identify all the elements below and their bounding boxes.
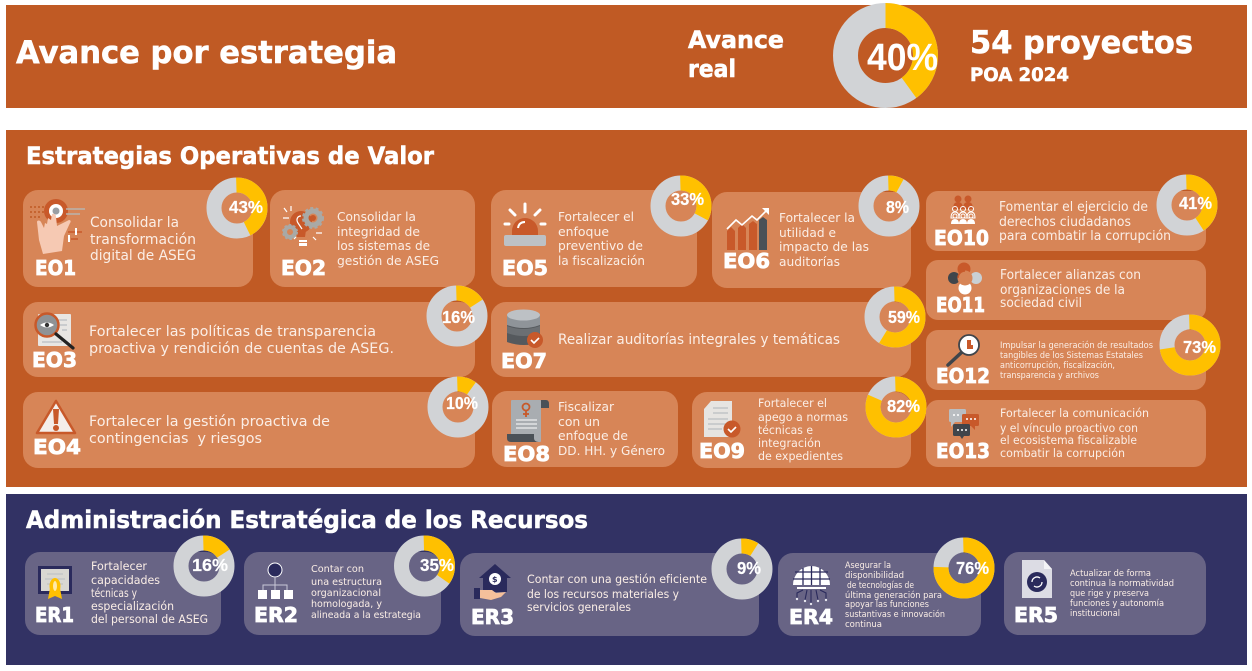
text: una estructura bbox=[311, 577, 382, 588]
card ER4 bbox=[778, 545, 989, 636]
panel: estrategias operativas de valor bbox=[6, 130, 1247, 487]
text: con un bbox=[558, 414, 600, 429]
avance real label: Avance bbox=[688, 26, 784, 54]
text bbox=[845, 561, 945, 630]
donut: avance real 40%: 40% bbox=[867, 37, 938, 79]
donut 16% bbox=[434, 293, 480, 339]
code: ER4 bbox=[789, 605, 833, 629]
card EO12 bbox=[926, 322, 1216, 390]
card EO4 bbox=[23, 384, 481, 468]
donut 41% bbox=[1164, 182, 1212, 228]
text: apoyar las funciones bbox=[845, 600, 929, 610]
donut: avance real 40% bbox=[846, 16, 938, 96]
donut 10% bbox=[435, 384, 481, 430]
text: del personal de ASEG bbox=[91, 612, 208, 626]
text: derechos ciudadanos bbox=[999, 215, 1131, 230]
text bbox=[1000, 268, 1141, 311]
text: Fortalecer bbox=[91, 559, 147, 573]
donut 9% bbox=[719, 546, 765, 592]
code: ER5 bbox=[1014, 603, 1058, 627]
text: contingencias y riesgos bbox=[89, 431, 262, 447]
icon: chat bubbles bbox=[949, 409, 979, 439]
icon: document refresh bbox=[1022, 560, 1052, 598]
text: utilidad e bbox=[779, 225, 836, 240]
text: de los recursos materiales y bbox=[527, 587, 679, 601]
text: integración bbox=[758, 436, 821, 450]
text: organizaciones de la bbox=[1000, 283, 1125, 298]
text: alineada a la estrategia bbox=[311, 610, 421, 621]
text: Fortalecer alianzas con bbox=[1000, 268, 1141, 283]
text: Realizar auditorías integrales y temáticas bbox=[558, 332, 840, 348]
text bbox=[1000, 340, 1153, 381]
donut 43%: 43% bbox=[229, 197, 263, 217]
icon: org chart bbox=[258, 563, 293, 599]
donut 16%: 16% bbox=[442, 307, 475, 327]
card EO8 bbox=[492, 391, 678, 467]
code: EO3 bbox=[32, 348, 77, 372]
text bbox=[558, 209, 645, 268]
code: EO2 bbox=[281, 256, 326, 280]
text: especialización bbox=[91, 599, 174, 613]
icon: citizens bbox=[951, 196, 975, 224]
card EO7 bbox=[491, 294, 920, 377]
text: continua bbox=[845, 620, 882, 630]
text: sustantivas e innovación bbox=[845, 609, 945, 620]
text: de tecnologías de bbox=[847, 581, 914, 591]
code: EO10 bbox=[934, 226, 989, 250]
card EO6 bbox=[712, 183, 912, 288]
header band bbox=[6, 5, 1247, 108]
icon: warning triangle bbox=[37, 401, 75, 433]
text: digital de ASEG bbox=[90, 248, 196, 264]
text bbox=[1000, 406, 1149, 460]
text: auditorías bbox=[779, 254, 840, 269]
text bbox=[558, 399, 665, 458]
text: gestión de ASEG bbox=[337, 253, 439, 268]
text: transformación bbox=[90, 232, 196, 248]
donut 73%: 73% bbox=[1183, 337, 1216, 357]
text: transparencia y archivos bbox=[1000, 371, 1099, 381]
code: ER3 bbox=[471, 605, 514, 629]
donut 82% bbox=[873, 384, 920, 430]
code: EO9 bbox=[699, 439, 745, 463]
icon: bulb and gears bbox=[283, 206, 323, 246]
code: EO6 bbox=[723, 249, 770, 273]
text: enfoque bbox=[558, 224, 609, 239]
text: continua la normatividad bbox=[1070, 579, 1174, 589]
text: Fortalecer la comunicación bbox=[1000, 406, 1149, 420]
text: integridad de bbox=[337, 224, 420, 239]
text bbox=[1070, 569, 1174, 619]
icon: rising bars bbox=[727, 208, 769, 250]
donut 82%: 82% bbox=[887, 396, 920, 416]
icon: document check bbox=[704, 401, 740, 438]
text: para combatir la corrupción bbox=[999, 229, 1171, 244]
donut 76% bbox=[941, 545, 989, 591]
card EO10 bbox=[926, 182, 1212, 251]
icon: alliance circle bbox=[948, 262, 982, 294]
text: Fortalecer la gestión proactiva de bbox=[89, 414, 330, 430]
icon: house in hand: $ bbox=[492, 575, 498, 584]
text bbox=[89, 414, 330, 447]
code: EO11 bbox=[936, 293, 985, 317]
text: Fomentar el ejercicio de bbox=[999, 200, 1148, 215]
text bbox=[527, 572, 707, 614]
donut 73% bbox=[1167, 322, 1216, 368]
text: servicios generales bbox=[527, 600, 631, 614]
icon: scroll gender bbox=[507, 400, 549, 442]
text: disponibilidad bbox=[845, 571, 904, 581]
text: DD. HH. y Género bbox=[558, 443, 665, 458]
text: preventivo de bbox=[558, 238, 643, 253]
text: institucional bbox=[1070, 609, 1120, 619]
donut 16%: 16% bbox=[192, 555, 228, 575]
icon: globe circuit bbox=[793, 566, 830, 605]
avance real label: real bbox=[688, 55, 736, 83]
text: Fiscalizar bbox=[558, 399, 615, 414]
text bbox=[89, 324, 394, 357]
code: EO1 bbox=[35, 256, 76, 280]
text: apego a normas bbox=[758, 410, 848, 424]
code: ER2 bbox=[254, 603, 298, 627]
panel: administracion estrategica de los recursos bbox=[6, 494, 1247, 665]
text: técnicas e bbox=[758, 423, 813, 437]
card EO13 bbox=[926, 400, 1206, 467]
card EO2 bbox=[270, 190, 475, 287]
text bbox=[999, 200, 1171, 244]
code: EO13 bbox=[936, 439, 990, 463]
proyectos count bbox=[970, 25, 1193, 86]
text: tangibles de los Sistemas Estatales bbox=[1000, 351, 1143, 361]
text: organizacional bbox=[311, 588, 381, 599]
code: EO12 bbox=[936, 364, 990, 388]
card ER1 bbox=[25, 543, 228, 635]
heading: Estrategias Operativas de Valor bbox=[26, 142, 434, 170]
donut 33% bbox=[658, 183, 704, 229]
text: Contar con bbox=[311, 564, 364, 575]
text: que rige y preserva bbox=[1070, 589, 1149, 599]
donut 35% bbox=[402, 543, 454, 589]
text: técnicas y bbox=[91, 586, 137, 600]
text: los sistemas de bbox=[337, 238, 430, 253]
text: Fortalecer las políticas de transparencia bbox=[89, 324, 376, 340]
text bbox=[758, 396, 848, 463]
text: capacidades bbox=[91, 573, 160, 587]
avance real label bbox=[688, 26, 784, 83]
proyectos count: POA 2024 bbox=[970, 64, 1069, 86]
text bbox=[779, 210, 869, 269]
heading: Administración Estratégica de los Recursos bbox=[26, 506, 588, 534]
donut 59%: 59% bbox=[888, 307, 920, 327]
text: y el vínculo proactivo con bbox=[1000, 421, 1138, 435]
donut 76%: 76% bbox=[956, 558, 989, 578]
card EO3 bbox=[23, 293, 480, 377]
text: impacto de las bbox=[779, 239, 869, 254]
card ER5 bbox=[1004, 552, 1206, 635]
donut 16% bbox=[181, 543, 228, 589]
donut 35%: 35% bbox=[420, 555, 454, 575]
donut 41%: 41% bbox=[1179, 193, 1212, 213]
text: Contar con una gestión eficiente bbox=[527, 572, 707, 586]
card EO11 bbox=[926, 260, 1206, 320]
code: EO4 bbox=[33, 435, 81, 459]
icon: touch hand bbox=[30, 199, 85, 254]
text: Impulsar la generación de resultados bbox=[1000, 340, 1153, 351]
text: la fiscalización bbox=[558, 253, 645, 268]
text: Consolidar la bbox=[337, 209, 416, 224]
text: enfoque de bbox=[558, 428, 628, 443]
text: el ecosistema fiscalizable bbox=[1000, 433, 1137, 447]
donut 10%: 10% bbox=[446, 393, 478, 413]
text bbox=[91, 559, 208, 626]
text: funciones y autonomía bbox=[1070, 599, 1164, 609]
proyectos count: 54 proyectos bbox=[970, 25, 1193, 61]
text: homologada, y bbox=[311, 599, 382, 610]
icon: magnifier eye bbox=[36, 314, 73, 348]
text: Asegurar la bbox=[845, 561, 891, 571]
text: sociedad civil bbox=[1000, 296, 1082, 311]
card ER2 bbox=[244, 543, 454, 635]
icon: database check bbox=[507, 310, 543, 348]
text: combatir la corrupción bbox=[1000, 446, 1125, 460]
donut 8%: 8% bbox=[886, 197, 909, 217]
code: EO7 bbox=[501, 349, 547, 373]
text: Fortalecer el bbox=[558, 209, 634, 224]
text: última generación para bbox=[845, 590, 942, 601]
code: EO5 bbox=[502, 256, 548, 280]
card ER3 bbox=[460, 546, 765, 636]
text bbox=[90, 215, 196, 264]
text: Actualizar de forma bbox=[1070, 569, 1151, 579]
icon: certificate bbox=[38, 566, 72, 599]
card EO9 bbox=[692, 384, 920, 468]
code: ER1 bbox=[35, 603, 74, 627]
donut 43% bbox=[214, 185, 263, 231]
text: anticorrupción, fiscalización, bbox=[1000, 360, 1115, 371]
text: Fortalecer la bbox=[779, 210, 855, 225]
text: Consolidar la bbox=[90, 215, 179, 231]
text: Fortalecer el bbox=[758, 396, 827, 410]
icon: magnifier clock bbox=[948, 335, 979, 365]
text: de expedientes bbox=[758, 449, 843, 463]
code: EO8 bbox=[503, 442, 550, 466]
text: proactiva y rendición de cuentas de ASEG. bbox=[89, 341, 394, 357]
donut 9%: 9% bbox=[737, 558, 761, 578]
icon: house in hand bbox=[474, 564, 511, 600]
text bbox=[311, 564, 421, 621]
donut 59% bbox=[872, 294, 920, 340]
card EO1 bbox=[23, 185, 263, 287]
icon: alarm light bbox=[504, 204, 546, 246]
text bbox=[337, 209, 439, 268]
title: Avance por estrategia bbox=[16, 35, 397, 71]
card EO5 bbox=[491, 183, 704, 287]
donut 8% bbox=[866, 183, 912, 229]
donut 33%: 33% bbox=[671, 189, 704, 209]
